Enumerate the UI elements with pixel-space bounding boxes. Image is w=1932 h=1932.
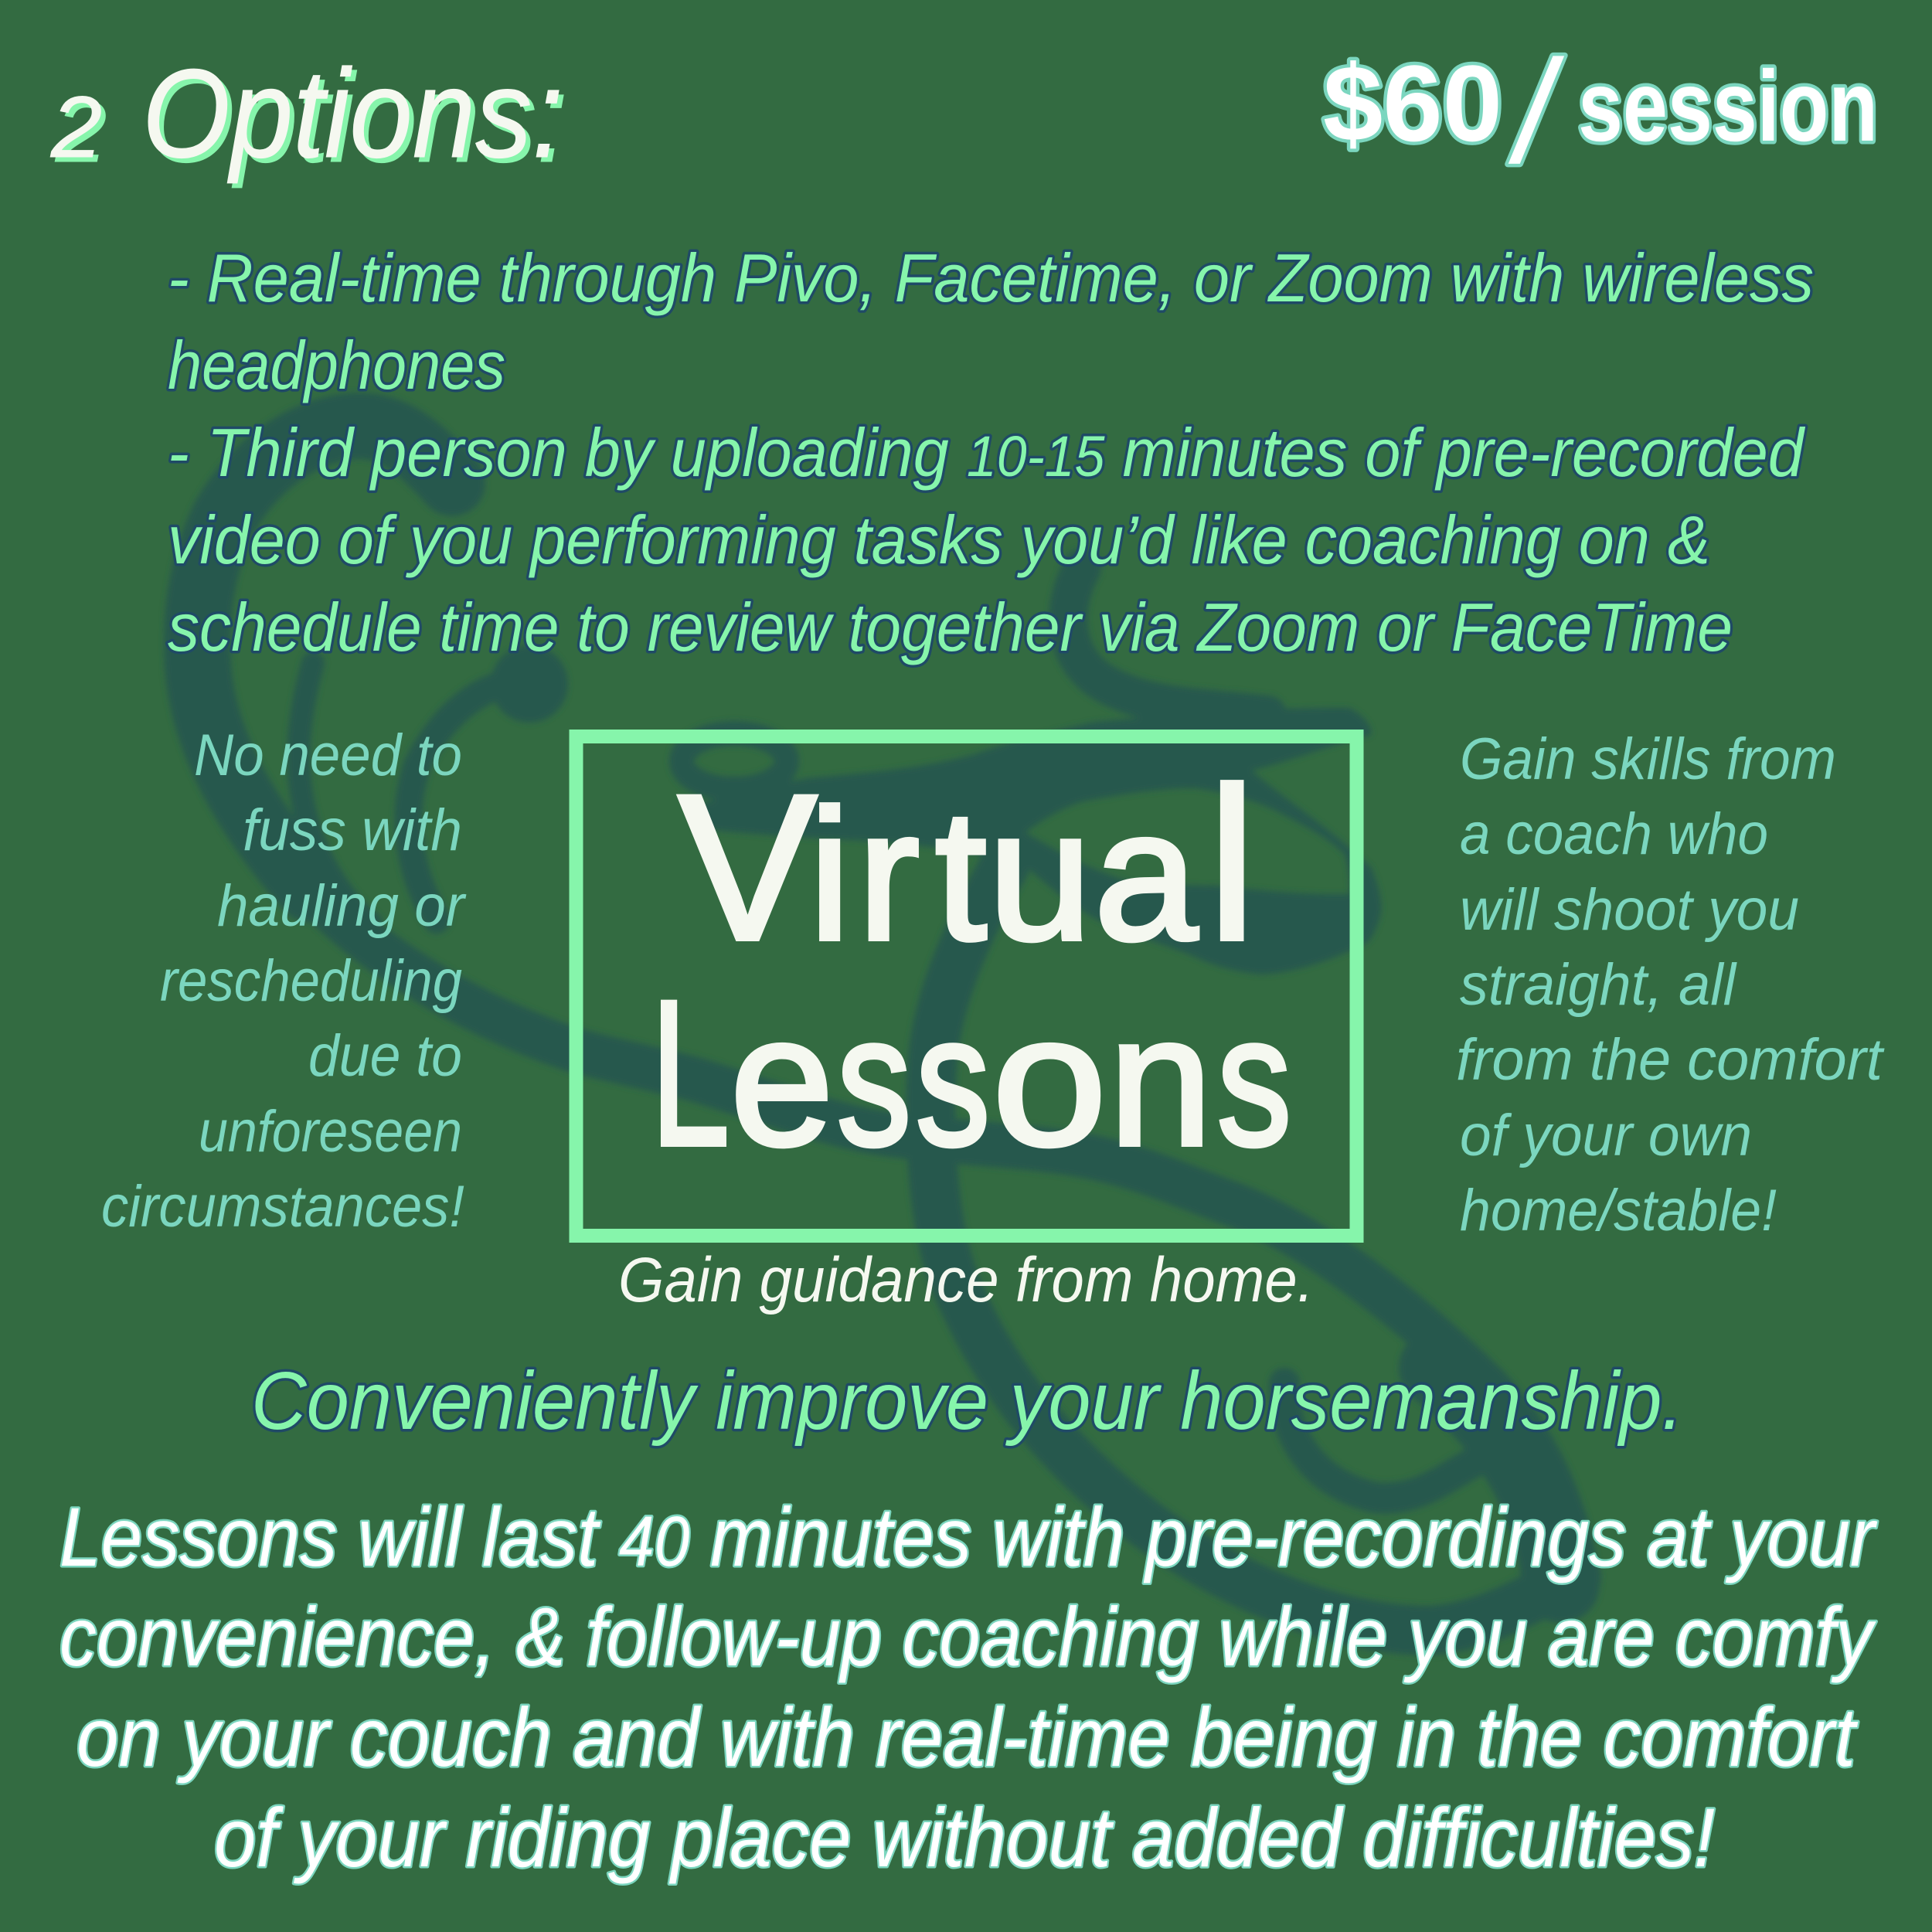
title text: Options: [142, 43, 563, 184]
title box [577, 736, 1357, 1236]
left side text: No need to [194, 723, 462, 788]
left side text [101, 723, 467, 1240]
headline: Virtual: t [935, 771, 987, 978]
left side text: hauling or [217, 873, 467, 939]
price slash: / [1504, 30, 1569, 194]
headline: Virtual: l [1208, 744, 1256, 985]
headline: Lessons: L [651, 957, 730, 1189]
headline: Virtual: r [858, 771, 920, 978]
right side text: a coach who [1460, 801, 1768, 867]
options description: - Real-time through Pivo, Facetime, or Zoom with wireless [168, 240, 1814, 316]
headline: Lessons: e [730, 977, 833, 1184]
price [1323, 30, 1878, 194]
headline: Virtual: u [988, 771, 1091, 978]
options description: schedule time to review together via Zoom or FaceTime [168, 589, 1733, 665]
right side text [1456, 726, 1885, 1243]
title shadow: 2 [55, 83, 107, 180]
title shadow: Options: [147, 47, 568, 189]
right side text: straight, all [1460, 952, 1737, 1018]
right side text: of your own [1460, 1103, 1752, 1168]
horse head logo watermark [197, 426, 1577, 1631]
right side text: Gain skills from [1460, 726, 1836, 792]
headline: Lessons: s [916, 977, 990, 1184]
options description: - Third person by uploading 10-15 minutes of pre-recorded [168, 414, 1806, 491]
subheading: Conveniently improve your horsemanship. [251, 1355, 1683, 1447]
headline: Virtual: V [679, 751, 818, 983]
price amount: $60 [1323, 43, 1502, 164]
headline: Lessons: o [992, 977, 1107, 1184]
headline: Virtual: i [809, 771, 850, 978]
right side text: will shoot you [1460, 877, 1799, 943]
headline: Lessons: s [1217, 977, 1291, 1184]
headline: Virtual: a [1094, 771, 1198, 978]
title text: 2 [50, 79, 102, 175]
tagline: Gain guidance from home. [618, 1245, 1314, 1315]
options description [168, 240, 1814, 665]
headline: Lessons: s [837, 977, 911, 1184]
closing paragraph: of your riding place without added difficulties! [214, 1791, 1715, 1884]
left side text: circumstances! [101, 1174, 464, 1240]
left side text: fuss with [243, 798, 462, 863]
left side text: unforeseen [199, 1099, 462, 1165]
options description: headphones [168, 327, 505, 403]
left side text: rescheduling [160, 948, 462, 1014]
options description: video of you performing tasks you’d like coaching on & [168, 502, 1710, 578]
title: 2 Options shadow and text [50, 43, 568, 189]
right side text: home/stable! [1460, 1178, 1777, 1243]
right side text: from the comfort [1456, 1027, 1885, 1093]
closing paragraph [60, 1490, 1878, 1884]
headline: Lessons: n [1109, 977, 1212, 1184]
left side text: due to [308, 1023, 462, 1089]
